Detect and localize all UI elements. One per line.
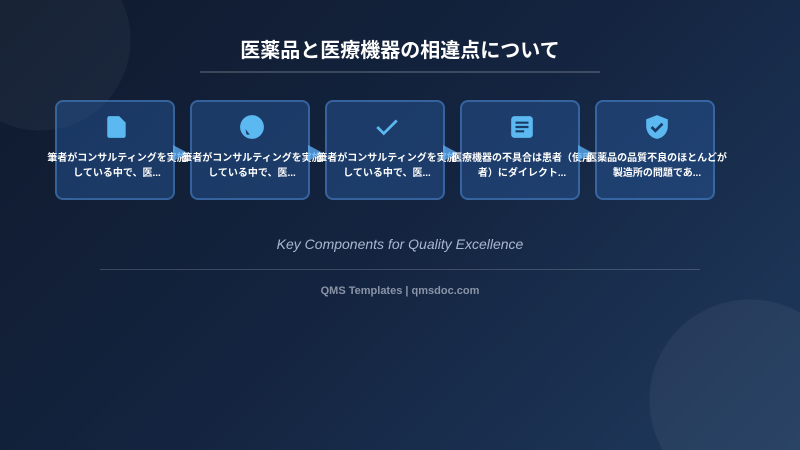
arrow 4	[578, 145, 593, 161]
card 1: 筆者がコンサルティングを実施	[47, 153, 187, 164]
card 1	[55, 100, 175, 200]
icon: shield	[646, 115, 668, 139]
card 2	[190, 100, 310, 200]
card 2: している中で、医...	[208, 168, 296, 179]
arrow 2	[308, 145, 323, 161]
arrow 3	[443, 145, 458, 161]
card 4: 医療機器の不具合は患者（使用	[452, 153, 592, 164]
card 4: 者）にダイレクト...	[478, 168, 566, 179]
card 5: 医薬品の品質不良のほとんどが	[587, 153, 727, 164]
icon: globe	[240, 115, 264, 139]
card 1: している中で、医...	[73, 168, 161, 179]
title: 医薬品と医療機器の相違点について	[240, 40, 560, 62]
card 5: 製造所の問題であ...	[613, 168, 701, 179]
icon: document	[511, 116, 533, 138]
arrow 1	[173, 145, 188, 161]
card 3: 筆者がコンサルティングを実施	[317, 153, 457, 164]
card 3	[325, 100, 445, 200]
card 4	[460, 100, 580, 200]
footer: QMS Templates | qmsdoc.com	[321, 285, 479, 297]
card 5	[595, 100, 715, 200]
icon: file	[107, 116, 126, 138]
subtitle: Key Components for Quality Excellence	[277, 236, 523, 252]
card 2: 筆者がコンサルティングを実施	[182, 153, 322, 164]
icon: check	[376, 120, 398, 136]
card 3: している中で、医...	[343, 168, 431, 179]
